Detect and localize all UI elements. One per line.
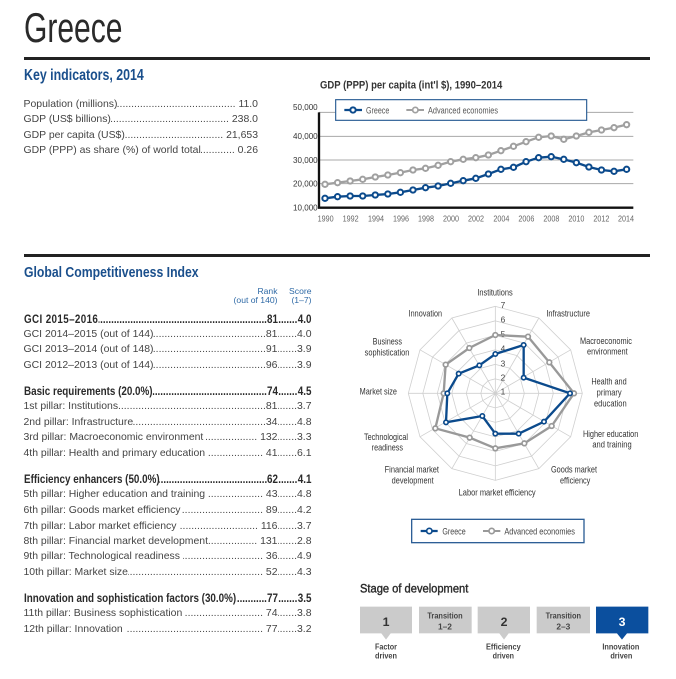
- radar axis labels: Business: [373, 337, 402, 347]
- GCI table: 3.3: [297, 432, 312, 442]
- transition 2-3: Transition: [546, 611, 581, 621]
- GCI table: 4.5: [297, 384, 311, 398]
- x axis labels: 2010: [568, 214, 585, 224]
- radar axis labels: education: [594, 399, 627, 409]
- GCI table: 96: [266, 360, 278, 370]
- GCI table: 3.9: [297, 360, 312, 370]
- radar axis labels: development: [392, 476, 434, 486]
- GCI table: 4.2: [297, 504, 312, 516]
- GCI table: 3.5: [297, 590, 311, 604]
- transition 1-2: 1–2: [438, 621, 452, 631]
- GCI table: 2.8: [297, 536, 312, 546]
- radar axis labels: Innovation: [409, 309, 442, 319]
- GCI table: 9th pillar: Technological readiness: [24, 550, 180, 562]
- GCI table: 91: [266, 344, 278, 355]
- x axis labels: 1996: [393, 214, 409, 224]
- series: Greece: [325, 157, 627, 198]
- x axis labels: 2002: [468, 214, 484, 224]
- axes: [319, 112, 633, 208]
- radar axis labels: readiness: [372, 443, 403, 453]
- transition 1-2: Transition: [427, 611, 463, 621]
- y axis labels: 30,000: [293, 155, 318, 165]
- chart title: GDP (PPP) per capita (int'l $), 1990–2014: [320, 80, 503, 92]
- radar axis labels: Technological: [364, 432, 408, 442]
- GCI table: GCI 2015–2016: [24, 312, 98, 326]
- key indicators table: GDP (PPP) as share (%) of world total: [24, 145, 201, 156]
- radar axis labels: Macroeconomic: [580, 336, 632, 346]
- key indicators table: 0.26: [238, 145, 258, 156]
- radar axis labels: Infrastructure: [546, 309, 590, 319]
- GCI table: 4.8: [297, 416, 312, 428]
- GCI table: 4th pillar: Health and primary education: [24, 448, 205, 458]
- legend: [336, 100, 587, 120]
- GCI table: GCI 2014–2015 (out of 144): [24, 329, 153, 340]
- GCI table: 36: [266, 550, 278, 562]
- stage 2: [478, 607, 530, 661]
- GCI table: 3.9: [297, 344, 312, 355]
- transition 2-3: 2–3: [556, 621, 571, 631]
- GCI table: 131: [260, 536, 278, 546]
- GCI table: 4.0: [297, 329, 312, 340]
- radar scale labels: 4: [501, 343, 506, 353]
- x axis labels: 1994: [368, 214, 384, 224]
- radar axis labels: efficiency: [560, 476, 591, 486]
- GCI table: 4.0: [297, 312, 311, 326]
- radar axis labels: Goods market: [551, 465, 597, 475]
- radar scale labels: [501, 300, 506, 397]
- GCI table: 4.3: [297, 566, 312, 578]
- title: Greece: [24, 4, 122, 51]
- radar scale labels: 5: [501, 329, 506, 339]
- GCI table: GCI 2013–2014 (out of 148): [24, 344, 153, 355]
- stage 2: Efficiency: [486, 642, 521, 652]
- x axis labels: 2004: [493, 214, 510, 224]
- radar scale labels: 1: [501, 387, 506, 397]
- GCI table: Basic requirements (20.0%): [24, 384, 152, 398]
- heading: global competitiveness index: Global Competitiveness Index: [24, 264, 199, 281]
- stage of development: [360, 581, 648, 661]
- GCI table: 4.9: [297, 550, 312, 562]
- top rule: [24, 56, 650, 60]
- x axis labels: 2006: [518, 214, 535, 224]
- radar scale labels: 7: [501, 300, 506, 310]
- stage 1: 1: [383, 615, 390, 629]
- GCI table: 81: [266, 329, 278, 340]
- GCI table: 81: [266, 400, 278, 412]
- GCI table: 6th pillar: Goods market efficiency: [24, 504, 181, 516]
- radar legend: Advanced economies: [504, 527, 575, 537]
- key indicators table: GDP per capita (US$): [24, 130, 125, 140]
- GCI table: 77: [267, 590, 277, 604]
- stage 1: [360, 607, 412, 661]
- radar axis labels: Health and: [591, 377, 627, 387]
- radar axis labels: Higher education: [583, 429, 638, 439]
- GCI table: 52: [266, 566, 278, 578]
- GCI table: 12th pillar: Innovation: [24, 624, 123, 634]
- GCI table: 34: [266, 416, 278, 428]
- GCI table: 7th pillar: Labor market efficiency: [24, 520, 176, 532]
- radar scale labels: 3: [501, 358, 506, 368]
- radar axis labels: [360, 288, 638, 498]
- stage heading: Stage of development: [360, 581, 469, 595]
- GCI table: 81: [267, 312, 277, 326]
- heading: key indicators: Key indicators, 2014: [24, 67, 144, 84]
- key indicators table: Population (millions): [24, 98, 117, 110]
- GCI table: Efficiency enhancers (50.0%): [24, 472, 159, 486]
- stage 3: Innovation: [602, 642, 639, 652]
- radar axis labels: sophistication: [365, 348, 409, 358]
- GCI table: GCI 2012–2013 (out of 144): [24, 360, 153, 370]
- key indicators table: GDP (US$ billions): [24, 114, 111, 125]
- y axis labels: 40,000: [293, 131, 318, 141]
- key indicators table: 11.0: [238, 98, 258, 110]
- GCI table: 8th pillar: Financial market development: [24, 536, 208, 546]
- radar chart: [360, 288, 638, 544]
- key indicators table: 21,653: [226, 130, 258, 140]
- stage 3: 3: [619, 615, 626, 629]
- GCI table: 2nd pillar: Infrastructure: [24, 416, 133, 428]
- x axis labels: 2014: [618, 214, 634, 224]
- stage 3: [596, 607, 648, 661]
- column header: rank: Rank: [257, 286, 278, 296]
- GCI table: 11th pillar: Business sophistication: [24, 608, 182, 618]
- legend: Advanced economies: [428, 106, 498, 116]
- stage 1: Factor: [375, 642, 398, 652]
- y axis labels: [293, 102, 318, 213]
- legend: Greece: [366, 106, 389, 116]
- stage 1: driven: [375, 651, 397, 661]
- GCI table: 4.8: [297, 488, 312, 500]
- GCI table: 77: [266, 624, 278, 634]
- radar legend: [412, 519, 584, 543]
- stage 3: driven: [610, 651, 632, 661]
- GCI table: 1st pillar: Institutions: [24, 400, 118, 412]
- radar axis labels: Financial market: [385, 465, 439, 475]
- transition 1-2: [419, 607, 472, 633]
- radar legend: Greece: [442, 527, 466, 537]
- key indicators table: 238.0: [232, 114, 258, 125]
- GCI table: 3.8: [297, 608, 312, 618]
- radar axis labels: Institutions: [477, 288, 513, 298]
- x axis labels: [318, 214, 634, 224]
- GCI table: 41: [266, 448, 278, 458]
- column header: score: [289, 286, 312, 304]
- GCI table: 89: [266, 504, 278, 516]
- x axis labels: 2008: [543, 214, 560, 224]
- radar axis labels: Labor market efficiency: [459, 488, 536, 498]
- GCI table: 3.7: [297, 400, 312, 412]
- GCI table: 43: [266, 488, 278, 500]
- GCI table: 5th pillar: Higher education and training: [24, 488, 205, 500]
- column header: score: (1–7): [291, 294, 312, 304]
- GCI table: 6.1: [297, 448, 312, 458]
- radar series: Greece: [446, 345, 570, 434]
- GCI table: 10th pillar: Market size: [24, 566, 128, 578]
- GCI table: 3.7: [297, 520, 312, 532]
- GCI table: 74: [267, 384, 277, 398]
- GCI table: 62: [267, 472, 277, 486]
- second rule: [24, 254, 650, 257]
- column header: rank: [234, 286, 278, 304]
- x axis labels: 1992: [343, 214, 359, 224]
- GCI table: [24, 312, 312, 634]
- radar axis labels: Market size: [360, 387, 397, 397]
- key indicators table: [24, 98, 258, 156]
- radar scale labels: 2: [501, 373, 506, 383]
- GCI table: 3rd pillar: Macroeconomic environment: [24, 432, 203, 442]
- radar axis labels: environment: [587, 347, 628, 357]
- x axis labels: 1990: [318, 214, 334, 224]
- transition 2-3: [537, 607, 590, 633]
- y axis labels: 10,000: [293, 203, 318, 213]
- x axis labels: 1998: [418, 214, 434, 224]
- column header: rank: (out of 140): [234, 294, 278, 304]
- stage 2: 2: [501, 615, 508, 629]
- column header: score: Score: [289, 286, 312, 296]
- stage 2: driven: [493, 651, 514, 661]
- line chart: GDP per capita: [293, 80, 634, 224]
- GCI table: 4.1: [297, 472, 311, 486]
- y axis labels: 20,000: [293, 179, 318, 189]
- radar series: advanced economies: [435, 335, 574, 448]
- GCI table: 74: [266, 608, 278, 618]
- GCI table: Innovation and sophistication factors (30.0%): [24, 590, 236, 604]
- radar axis labels: primary: [597, 388, 622, 398]
- radar axis labels: and training: [592, 440, 632, 450]
- GCI table: 3.2: [297, 624, 312, 634]
- GCI table: 116: [261, 520, 278, 532]
- series: advanced economies: [325, 125, 627, 184]
- y axis labels: 50,000: [293, 102, 318, 112]
- radar grid: [408, 306, 582, 480]
- x axis labels: 2000: [443, 214, 459, 224]
- radar scale labels: 6: [501, 314, 506, 324]
- GCI table: 132: [260, 432, 278, 442]
- x axis labels: 2012: [593, 214, 610, 224]
